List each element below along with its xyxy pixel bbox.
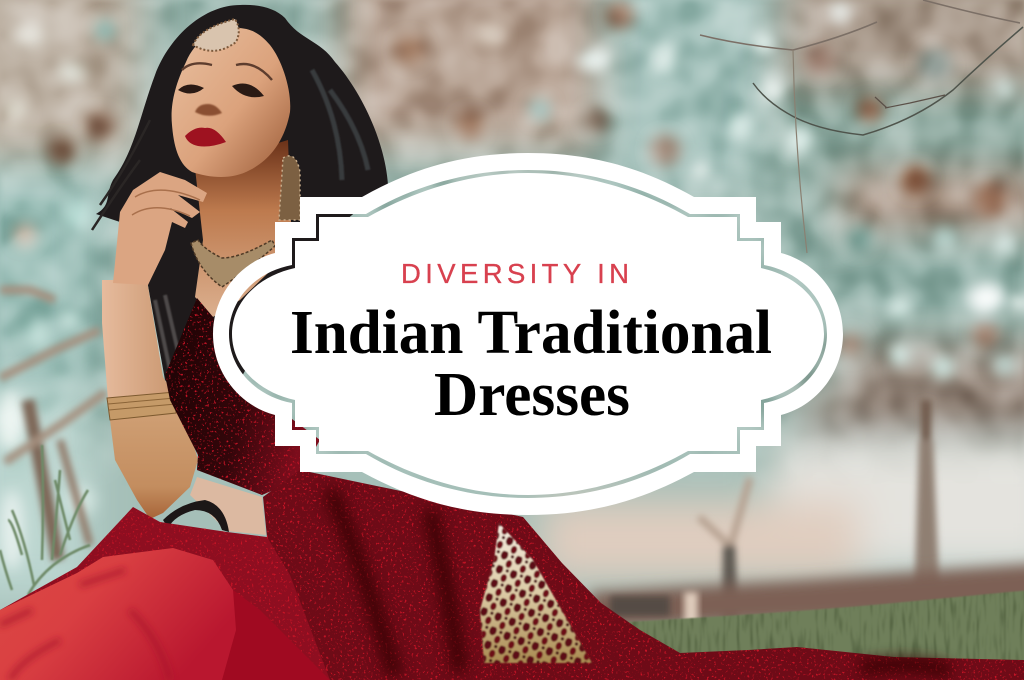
lips — [185, 128, 226, 146]
tree trunks and ground — [0, 290, 1024, 680]
bare branches top right — [700, 0, 1023, 253]
hair — [92, 5, 388, 420]
arm and hand — [102, 172, 207, 519]
subtitle: DIVERSITY IN — [401, 258, 629, 289]
title badge — [213, 153, 843, 515]
eyes and brows — [178, 63, 272, 116]
crimson fold — [205, 560, 330, 680]
foliage at lower left — [0, 445, 90, 595]
silk folds — [0, 570, 170, 680]
midriff — [190, 477, 266, 535]
title: Indian Traditional — [290, 299, 772, 367]
hair loop at waist — [163, 500, 229, 532]
grass — [625, 590, 1024, 680]
sequin drape — [0, 507, 330, 680]
badge inner panel — [232, 173, 824, 495]
red silk drape — [0, 548, 236, 680]
title line two: Dresses — [434, 361, 630, 429]
blouse — [165, 298, 320, 495]
neck and chest — [195, 140, 292, 317]
maang tikka — [193, 19, 239, 51]
badge frame with photo-revealing line — [213, 153, 843, 515]
necklace — [191, 240, 275, 287]
face — [172, 28, 290, 177]
earring — [279, 156, 300, 220]
sequin skirt — [263, 470, 1024, 680]
skirt shadows — [330, 490, 950, 676]
mottled foliage texture — [0, 0, 1024, 454]
lace window — [480, 523, 592, 663]
